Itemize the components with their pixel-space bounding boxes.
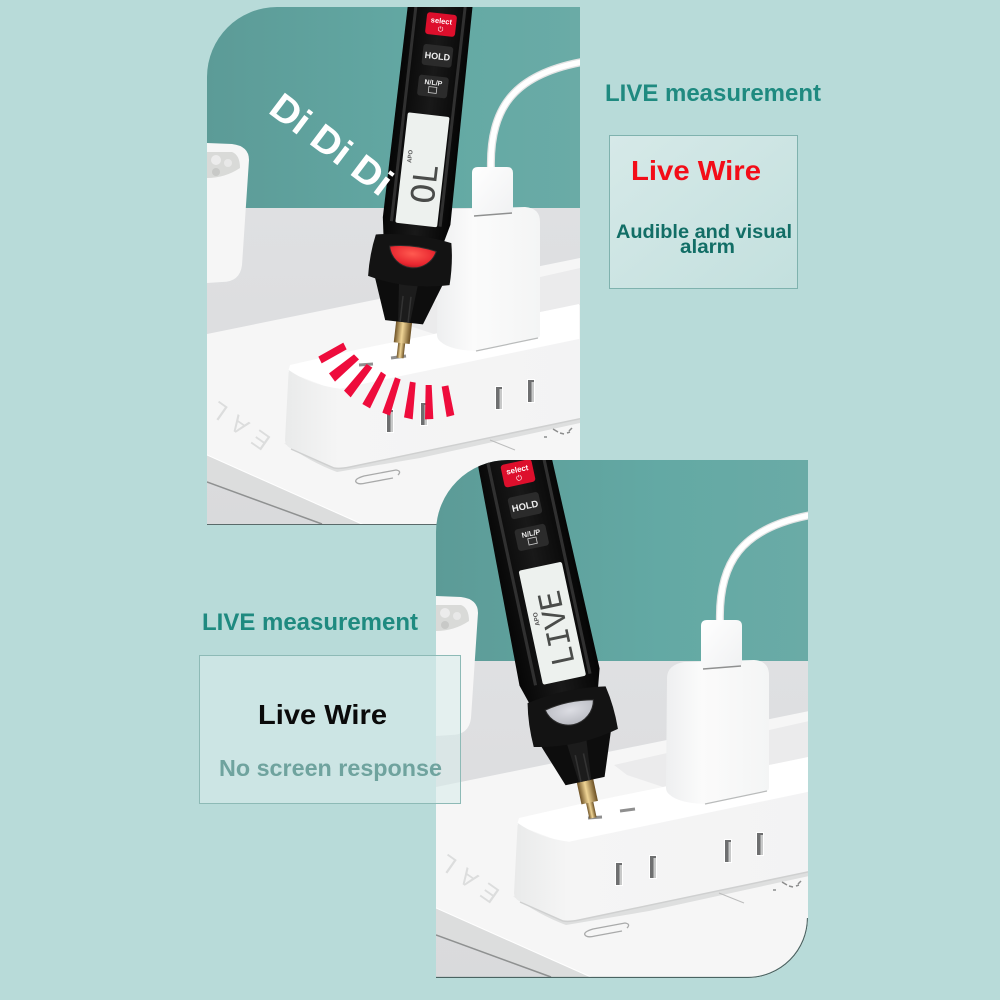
select button: ⏻ [437, 25, 444, 34]
LCD display [395, 112, 455, 228]
HOLD button [421, 44, 454, 68]
LCD display [519, 561, 589, 685]
Di Di Di sound label: Di Di Di [262, 86, 400, 205]
pale indicator light [544, 699, 594, 726]
callout title: Live Wire [631, 155, 761, 186]
tester pen with red indicator [368, 7, 472, 358]
LCD display: APO [407, 149, 415, 163]
select button: ⏻ [515, 473, 523, 483]
HOLD button: HOLD [511, 499, 540, 515]
panel: upper product photo with alarm [198, 0, 582, 528]
faint notebook lettering: EAL [427, 843, 504, 908]
callout description: No screen response [219, 755, 442, 781]
N/L/P button [417, 74, 449, 99]
callout: live wire no screen response [200, 656, 460, 804]
N/L/P button: N/L/P [424, 79, 443, 88]
LCD display: APO [532, 611, 542, 626]
red alarm rays [318, 343, 454, 419]
N/L/P button: N/L/P [521, 527, 541, 540]
select button [500, 459, 536, 488]
callout: live wire audible and visual alarm [610, 136, 798, 288]
select button: select [430, 15, 453, 27]
tester pen with pale indicator [478, 460, 618, 819]
callout title: Live Wire [258, 699, 387, 730]
callout description: alarm [680, 237, 735, 258]
panel: lower product photo without response [436, 460, 808, 978]
HOLD button [507, 492, 543, 520]
LCD display: LIVE [533, 587, 586, 669]
callout description: Audible and visual [616, 222, 792, 243]
heading: lower LIVE measurement: LIVE measurement [202, 609, 418, 636]
LCD display: OL [404, 162, 449, 206]
heading: upper LIVE measurement: LIVE measurement [605, 80, 821, 107]
N/L/P button [514, 523, 549, 552]
red indicator light [389, 245, 437, 268]
faint notebook lettering: EAL [198, 390, 275, 455]
HOLD button: HOLD [424, 50, 451, 63]
select button: select [505, 463, 529, 477]
select button [425, 12, 457, 37]
